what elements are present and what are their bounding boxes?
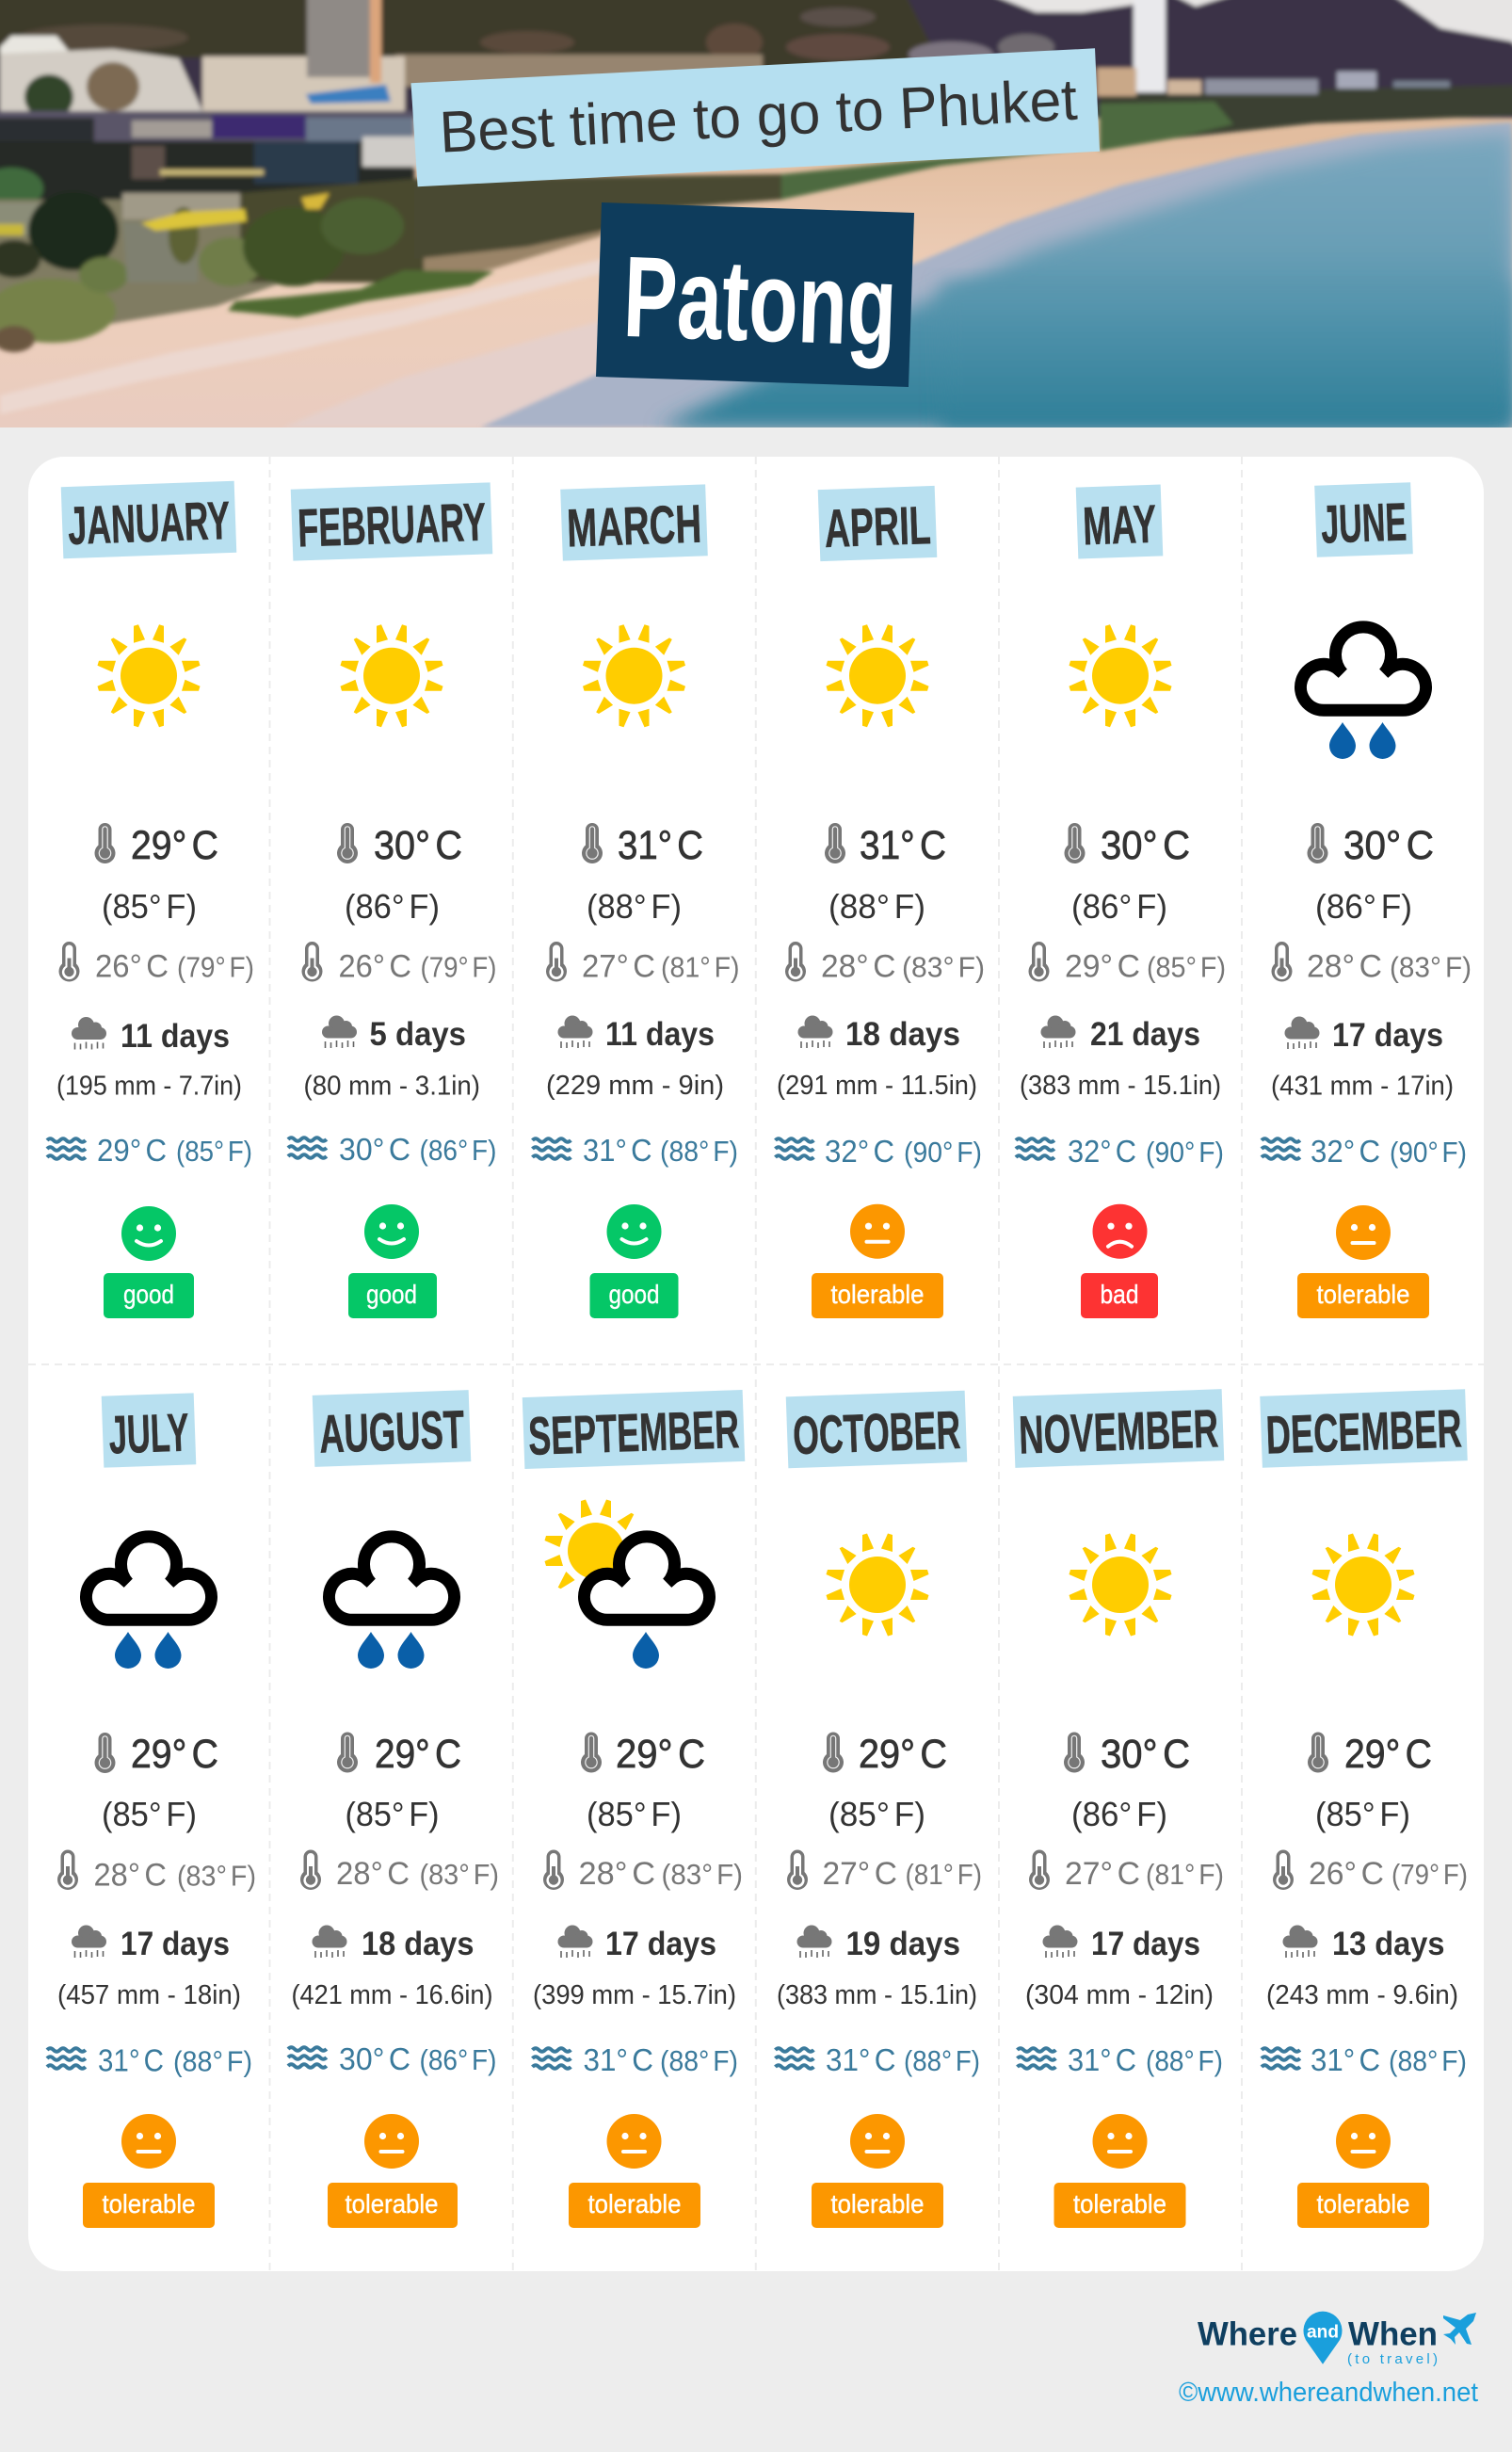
rainy days (313, 1925, 475, 1962)
rating: tolerable: tolerable (345, 2189, 439, 2218)
low temperature: (81° F) (661, 951, 740, 983)
low temperature: 28° C (578, 1856, 655, 1892)
icon: sun (583, 624, 685, 727)
rainfall amount: (229 mm - 9in) (546, 1071, 724, 1101)
rating: tolerable (328, 2114, 458, 2228)
sea temperature: (88° F) (1389, 2044, 1467, 2077)
high temperature fahrenheit: (85° F) (102, 887, 197, 926)
sea temperature: (90° F) (1390, 1136, 1467, 1169)
column: January (47, 481, 254, 1318)
sea temperature: 31° C (1068, 2042, 1136, 2077)
high temperature fahrenheit: (86° F) (345, 887, 440, 926)
low temperature (1028, 942, 1226, 985)
low temperature (787, 1849, 982, 1892)
sea temperature (776, 1134, 982, 1169)
sea temperature: (85° F) (176, 1135, 252, 1168)
column: November (1013, 1389, 1224, 2228)
month label: August: AUGUST (318, 1399, 465, 1465)
rating: good: good (608, 1280, 659, 1309)
rainy days: 5 days (369, 1016, 466, 1053)
rainy days (322, 1015, 466, 1053)
icon: sun (1070, 624, 1171, 727)
rating: tolerable: tolerable (1316, 2189, 1410, 2218)
rainfall amount: (80 mm - 3.1in) (303, 1072, 480, 1102)
month label: August (313, 1390, 471, 1467)
rating: good (104, 1206, 194, 1318)
rating: tolerable (569, 2114, 700, 2228)
heading tag: Best time to go to Phuket: Best time to go to Phuket (438, 68, 1079, 166)
high temperature fahrenheit: (85° F) (102, 1795, 197, 1833)
rating: tolerable: tolerable (102, 2189, 196, 2218)
low temperature: (83° F) (1390, 951, 1472, 983)
sea temperature (1262, 1134, 1467, 1169)
rainfall amount: (291 mm - 11.5in) (777, 1071, 977, 1101)
low temperature: (81° F) (1146, 1858, 1224, 1891)
sea temperature: (86° F) (420, 2043, 497, 2076)
rainy days (1282, 1925, 1444, 1962)
sea temperature: 30° C (339, 1132, 410, 1167)
low temperature: 28° C (821, 949, 896, 985)
rating: tolerable (1297, 1205, 1429, 1318)
rating: tolerable (1297, 2114, 1429, 2228)
rating: bad (1081, 1204, 1158, 1318)
low temperature: 28° C (1307, 949, 1382, 985)
high temperature fahrenheit: (88° F) (828, 887, 925, 926)
high temperature (1308, 1732, 1432, 1777)
low temperature: (83° F) (661, 1858, 743, 1891)
rating: good: good (123, 1280, 174, 1309)
month label: March: MARCH (566, 494, 702, 558)
high temperature: 29° C (859, 1732, 947, 1777)
low temperature: 27° C (582, 949, 655, 985)
high temperature (1064, 823, 1190, 868)
high temperature: 30° C (1101, 1732, 1190, 1777)
sea temperature (47, 1133, 252, 1168)
low temperature: (83° F) (177, 1859, 256, 1893)
low temperature (301, 942, 497, 985)
copyright: website address: ©www.whereandwhen.net (1179, 2378, 1478, 2408)
column: April (776, 486, 985, 1318)
high temperature (1307, 823, 1434, 868)
logo: Where and When: (to travel) (1347, 2351, 1438, 2367)
icon: rain cloud (1300, 627, 1426, 759)
rainy days (72, 1017, 230, 1055)
column: May (1016, 484, 1226, 1318)
low temperature (1271, 942, 1472, 985)
rainfall amount: (399 mm - 15.7in) (533, 1980, 736, 2010)
sea temperature (1262, 2042, 1467, 2077)
low temperature: 26° C (1309, 1856, 1384, 1892)
low temperature: 28° C (94, 1857, 167, 1893)
sea temperature (533, 1133, 738, 1168)
rainfall amount: (457 mm - 18in) (57, 1980, 241, 2010)
sea temperature: 31° C (98, 2043, 164, 2077)
sea temperature: 30° C (339, 2041, 410, 2076)
sea temperature: 31° C (583, 1133, 651, 1168)
sea temperature: (86° F) (420, 1134, 497, 1167)
icon: rain cloud (329, 1537, 455, 1669)
high temperature (825, 823, 946, 868)
month label: February: FEBRUARY (297, 492, 487, 558)
icon: sun (1312, 1533, 1414, 1637)
sea temperature: 31° C (826, 2042, 896, 2077)
rainy days: 17 days (605, 1926, 716, 1962)
rainfall amount: (421 mm - 16.6in) (292, 1980, 493, 2010)
high temperature: 30° C (374, 823, 462, 868)
icon: rain cloud (86, 1537, 212, 1669)
low temperature (300, 1849, 499, 1892)
sea temperature: (88° F) (904, 2044, 980, 2077)
icon: sun (827, 624, 928, 727)
low temperature: (83° F) (902, 951, 985, 983)
column: March (533, 484, 740, 1318)
rainy days: 18 days (362, 1926, 475, 1962)
sea temperature: (90° F) (1146, 1136, 1224, 1169)
column: June (1262, 482, 1472, 1318)
icon: sun (98, 624, 200, 727)
logo: Where and When (1198, 2312, 1476, 2367)
low temperature: (79° F) (1391, 1858, 1468, 1891)
low temperature (785, 942, 985, 985)
month label: February (291, 482, 492, 561)
high temperature fahrenheit: (86° F) (1071, 1795, 1167, 1833)
high temperature: 29° C (131, 823, 218, 868)
low temperature (58, 942, 254, 985)
low temperature: 29° C (1065, 949, 1140, 985)
low temperature (546, 942, 740, 985)
sea temperature: 31° C (1311, 2042, 1380, 2077)
high temperature fahrenheit: (85° F) (345, 1795, 439, 1833)
low temperature (57, 1849, 256, 1893)
high temperature (337, 823, 462, 868)
rating: tolerable (83, 2114, 215, 2228)
month label: September (523, 1390, 745, 1469)
rating: tolerable: tolerable (1316, 1280, 1410, 1309)
icon: sun (827, 1533, 928, 1637)
high temperature (823, 1732, 947, 1777)
rating: tolerable: tolerable (830, 1280, 925, 1309)
sea temperature (776, 2042, 980, 2077)
month label: January: JANUARY (67, 491, 231, 557)
rainfall amount: (195 mm - 7.7in) (56, 1072, 242, 1102)
hero photo: Patong beach (0, 0, 1512, 427)
logo: Where and When: and (1307, 2323, 1339, 2343)
high temperature (94, 1732, 218, 1777)
low temperature: (79° F) (420, 951, 497, 983)
sea temperature (533, 2042, 738, 2077)
rainy days: 18 days (845, 1016, 960, 1053)
rainy days: 17 days (1091, 1926, 1200, 1962)
sea temperature: 29° C (97, 1133, 167, 1168)
month label: April: APRIL (824, 495, 932, 559)
rainy days: 13 days (1332, 1926, 1444, 1962)
low temperature (543, 1849, 743, 1892)
panel: monthly climate table (28, 457, 1484, 2271)
rainy days: 19 days (845, 1926, 960, 1962)
high temperature: 29° C (1344, 1732, 1432, 1777)
rainy days (796, 1925, 960, 1962)
high temperature: 30° C (1343, 823, 1434, 868)
low temperature: 27° C (823, 1856, 897, 1892)
high temperature fahrenheit: (85° F) (828, 1795, 925, 1833)
high temperature fahrenheit: (85° F) (1315, 1795, 1410, 1833)
rainy days (72, 1925, 230, 1962)
column: October (776, 1391, 982, 2228)
high temperature fahrenheit: (88° F) (587, 887, 682, 926)
column: September (523, 1390, 745, 2228)
month label: November: NOVEMBER (1018, 1398, 1219, 1466)
sea temperature: 32° C (1311, 1134, 1380, 1169)
month label: April (818, 486, 937, 561)
month label: June (1314, 482, 1413, 557)
high temperature: 31° C (618, 823, 703, 868)
column: July (47, 1393, 256, 2228)
rating: tolerable: tolerable (1073, 2189, 1166, 2218)
column: February (288, 482, 497, 1318)
rainy days (798, 1015, 960, 1053)
high temperature (581, 1732, 705, 1777)
high temperature (582, 823, 703, 868)
heading tag: Best time to go to Phuket (410, 48, 1100, 186)
sea temperature: (88° F) (660, 2044, 738, 2077)
sea temperature: (88° F) (660, 1135, 738, 1168)
low temperature: (81° F) (906, 1858, 982, 1891)
rainy days: 17 days (121, 1926, 230, 1962)
rainy days (557, 1015, 715, 1053)
icon: sun behind rain cloud (544, 1499, 710, 1669)
title tag: Patong (596, 202, 914, 387)
rainy days (557, 1925, 716, 1962)
rainfall amount: (383 mm - 15.1in) (1020, 1071, 1221, 1101)
low temperature: 28° C (336, 1856, 410, 1892)
rating: good (348, 1204, 437, 1318)
rainy days: 17 days (1332, 1017, 1443, 1054)
high temperature (1064, 1732, 1190, 1777)
high temperature fahrenheit: (85° F) (587, 1795, 682, 1833)
rating: tolerable: tolerable (830, 2189, 925, 2218)
low temperature: (83° F) (420, 1858, 499, 1891)
high temperature (337, 1732, 461, 1777)
month label: July: JULY (108, 1403, 190, 1465)
sea temperature (288, 2041, 497, 2076)
month label: May (1076, 484, 1163, 559)
low temperature: 27° C (1065, 1856, 1140, 1892)
month label: March (560, 484, 708, 561)
rating: tolerable (1054, 2114, 1186, 2228)
rainy days: 21 days (1090, 1016, 1200, 1053)
rating: good: good (366, 1280, 417, 1309)
low temperature: (85° F) (1147, 951, 1226, 983)
sea temperature (1017, 2042, 1223, 2077)
rainfall amount: (431 mm - 17in) (1271, 1072, 1454, 1102)
sea temperature (1016, 1134, 1224, 1169)
rainfall amount: (243 mm - 9.6in) (1266, 1980, 1458, 2010)
high temperature fahrenheit: (86° F) (1315, 887, 1412, 926)
sea temperature: (88° F) (1146, 2044, 1223, 2077)
logo: Where and When: Where (1198, 2316, 1297, 2353)
month label: July (102, 1393, 196, 1468)
icon: sun (1070, 1533, 1171, 1637)
high temperature: 31° C (860, 823, 946, 868)
sea temperature: 32° C (825, 1134, 894, 1169)
month label: November (1013, 1389, 1224, 1468)
rating: bad: bad (1100, 1280, 1139, 1309)
rainy days: 11 days (605, 1016, 715, 1053)
sea temperature (288, 1132, 497, 1167)
icon: sun (341, 624, 442, 727)
high temperature (94, 823, 218, 868)
rainy days (1041, 1015, 1200, 1053)
month label: October: OCTOBER (792, 1400, 961, 1466)
sea temperature (47, 2043, 252, 2077)
high temperature: 29° C (131, 1732, 218, 1777)
high temperature: 29° C (375, 1732, 461, 1777)
high temperature fahrenheit: (86° F) (1071, 887, 1167, 926)
month label: October (786, 1391, 967, 1468)
low temperature: (79° F) (177, 951, 254, 983)
rating: good (589, 1204, 678, 1318)
high temperature: 30° C (1101, 823, 1190, 868)
rating: tolerable: tolerable (587, 2189, 682, 2218)
rainy days (1043, 1925, 1200, 1962)
title tag: Patong: Patong (621, 233, 899, 370)
logo: Where and When: When (1348, 2316, 1438, 2353)
sea temperature: (90° F) (904, 1136, 982, 1169)
rainfall amount: (383 mm - 15.1in) (777, 1980, 977, 2010)
rating: tolerable (812, 2114, 943, 2228)
low temperature: 26° C (339, 949, 411, 985)
column: August (288, 1390, 499, 2228)
rainy days: 11 days (121, 1018, 230, 1055)
low temperature (1029, 1849, 1224, 1892)
sea temperature: (88° F) (173, 2045, 252, 2077)
rating: tolerable (812, 1204, 943, 1318)
column: December (1260, 1389, 1468, 2228)
high temperature: 29° C (616, 1732, 705, 1777)
month label: January (61, 481, 236, 558)
month label: May: MAY (1082, 494, 1157, 557)
month label: September: SEPTEMBER (527, 1399, 740, 1467)
month label: June: JUNE (1320, 492, 1407, 556)
rainfall amount: (304 mm - 12in) (1025, 1980, 1214, 2010)
low temperature: 26° C (95, 949, 169, 985)
sea temperature: 31° C (584, 2042, 653, 2077)
sea temperature: 32° C (1068, 1134, 1136, 1169)
low temperature (1273, 1849, 1468, 1892)
rainy days (1284, 1017, 1443, 1054)
